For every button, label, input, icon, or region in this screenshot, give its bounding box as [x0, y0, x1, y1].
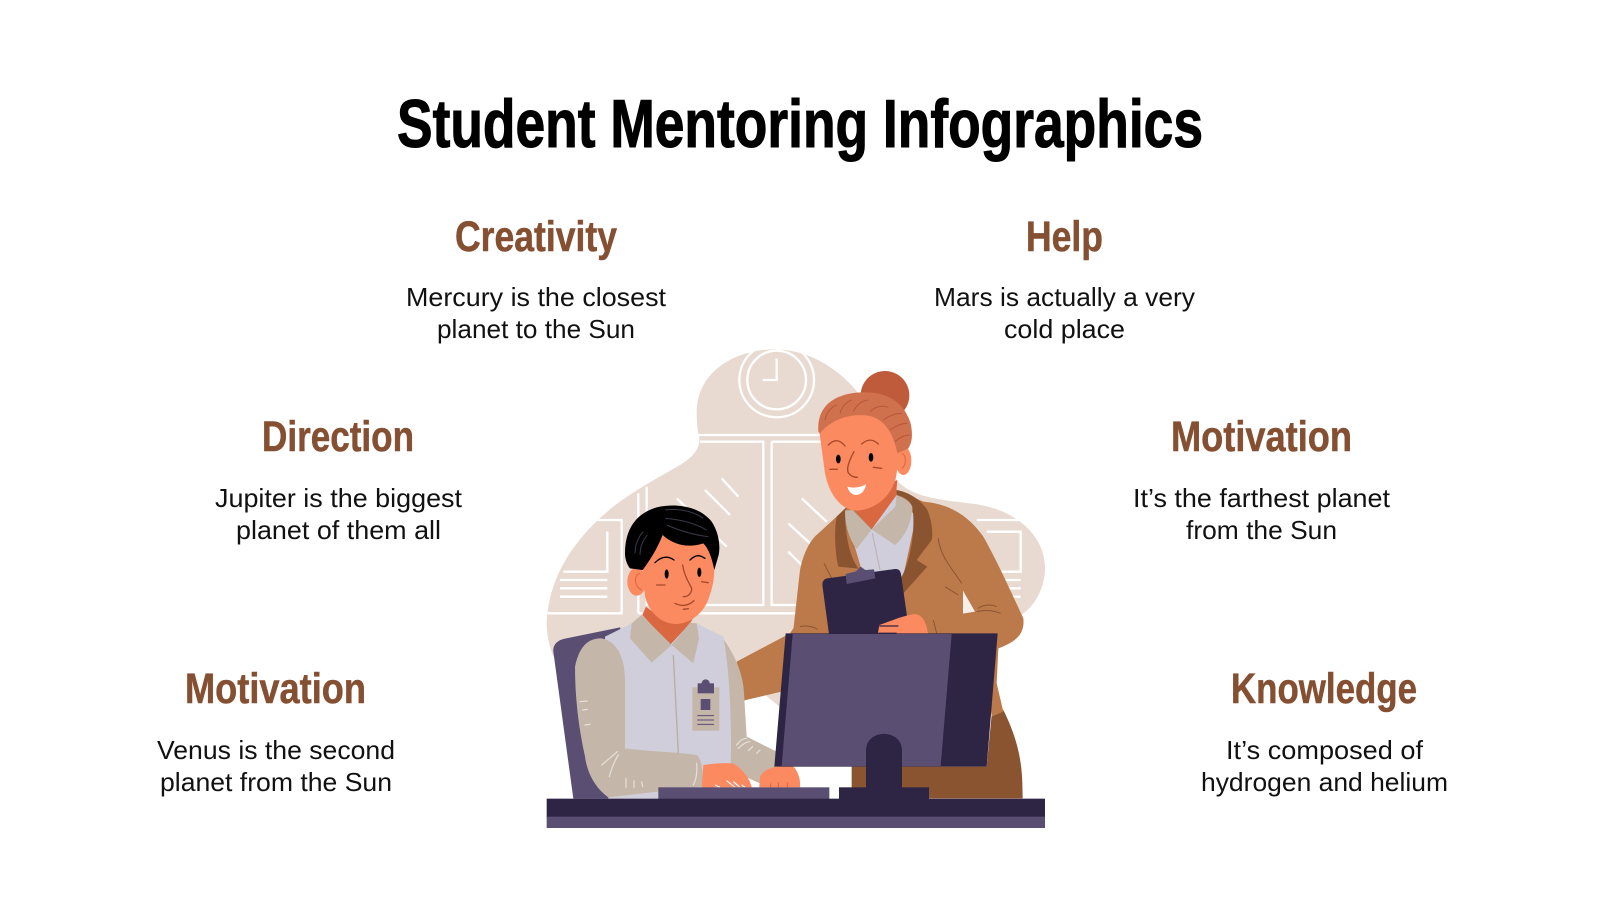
id badge	[692, 679, 719, 731]
panel: Direction	[215, 413, 463, 545]
panel: Creativity	[406, 213, 667, 344]
mentor neck	[852, 480, 897, 529]
chair	[553, 627, 637, 799]
text: Motivation left description	[157, 735, 395, 797]
panel: Motivation right	[1133, 413, 1391, 545]
heading: Creativity: Creativity	[455, 213, 617, 261]
student facial features	[655, 556, 708, 609]
mentor facial features	[828, 440, 882, 495]
desk	[547, 799, 1045, 828]
text: Motivation right description: from the Sun	[1186, 515, 1337, 545]
mentor jacket	[790, 490, 1024, 717]
monitor base	[839, 787, 929, 799]
heading: Direction: Direction	[262, 413, 414, 461]
keyboard	[658, 787, 829, 799]
mentor ear	[895, 446, 911, 475]
mentor collar	[845, 495, 912, 549]
text: Motivation left description: planet from the Sun	[160, 767, 392, 797]
mentor hair	[818, 392, 912, 453]
panel: Knowledge	[1201, 665, 1448, 797]
heading: Knowledge: Knowledge	[1231, 665, 1417, 713]
panel: Motivation left	[157, 665, 395, 797]
figure: student	[553, 505, 800, 799]
title: Student Mentoring Infographics	[397, 86, 1203, 162]
student left sleeve	[575, 638, 703, 797]
text: Knowledge description	[1201, 735, 1448, 797]
background blob with office line art	[543, 343, 1050, 710]
text: Help description: cold place	[1004, 314, 1125, 344]
sleeve creases	[580, 701, 760, 787]
panel: Help	[934, 213, 1195, 344]
text: Help description: Mars is actually a very	[934, 282, 1195, 312]
heading: Help: Help	[1026, 213, 1103, 261]
student collar	[630, 615, 699, 663]
text: Motivation left description: Venus is the second	[157, 735, 395, 765]
text: Creativity description	[406, 282, 667, 344]
text: Motivation right description: It’s the farthest planet	[1133, 483, 1391, 513]
text: Direction description: planet of them all	[236, 515, 441, 545]
student hands	[702, 763, 800, 787]
heading: Motivation right: Motivation	[1171, 413, 1352, 461]
text: Creativity description: planet to the Sun	[437, 314, 635, 344]
mentor hand	[877, 614, 928, 637]
student shirt	[605, 623, 731, 799]
mentor skirt	[852, 710, 1023, 798]
monitor stand	[866, 734, 902, 798]
text: Help description	[934, 282, 1195, 344]
text: Knowledge description: hydrogen and helium	[1201, 767, 1448, 797]
heading: Motivation left: Motivation	[185, 665, 366, 713]
student hair	[625, 505, 719, 570]
figure: mentor	[737, 371, 1024, 798]
illustration: mentor and student at computer	[543, 343, 1050, 828]
text: Direction description: Jupiter is the biggest	[215, 483, 463, 513]
text: Motivation right description	[1133, 483, 1391, 545]
computer monitor	[774, 633, 998, 799]
student face	[642, 527, 714, 624]
clipboard	[822, 567, 907, 637]
mentor bun	[861, 371, 909, 420]
text: Direction description	[215, 483, 463, 545]
shirt placket	[673, 655, 678, 753]
mentor face	[819, 406, 899, 511]
student right sleeve	[722, 637, 777, 783]
text: Knowledge description: It’s composed of	[1226, 735, 1424, 765]
mentor shirt	[845, 495, 916, 583]
mentor jacket creases	[800, 538, 1001, 633]
student ear	[627, 568, 646, 596]
mentor lapels	[835, 490, 932, 593]
mentor arm reaching to student	[737, 623, 830, 701]
gap between arm and torso	[963, 591, 975, 614]
text: Creativity description: Mercury is the closest	[406, 282, 667, 312]
student neck	[642, 607, 700, 645]
